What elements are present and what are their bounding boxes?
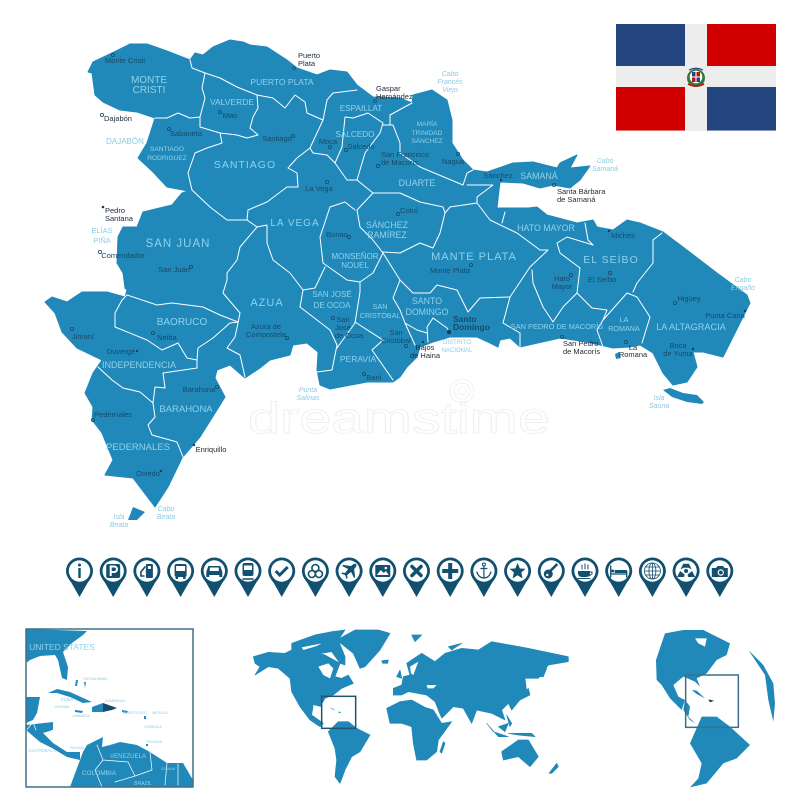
inset map: Caribbean region: JAMAICA <box>72 713 90 718</box>
province labels: NOUEL <box>341 261 369 270</box>
icon: biohazard <box>302 558 329 597</box>
labels outside the coastline: Isla <box>654 395 665 402</box>
inset map: Caribbean region: TRINIDAD <box>146 740 163 744</box>
locator box <box>686 675 738 727</box>
city labels: La <box>629 343 638 352</box>
city labels: San Juan <box>158 265 190 274</box>
icon: fuel station <box>133 558 160 597</box>
locator box <box>322 696 356 728</box>
labels outside the coastline: ELÍAS <box>91 226 113 235</box>
city labels: Salcedo <box>347 142 375 151</box>
icon: bed <box>605 558 632 597</box>
inset map: Caribbean region: ANTIGUA <box>152 711 168 715</box>
city labels: Barahona <box>183 385 216 394</box>
icon: coffee cup <box>572 558 598 597</box>
globe view <box>656 630 775 787</box>
city labels: José <box>335 323 351 332</box>
North America <box>656 630 730 710</box>
inset map: Caribbean region: CUBA <box>61 697 73 702</box>
inset map: Caribbean region: DOMINICA <box>144 725 162 729</box>
Eurasia <box>393 642 568 723</box>
labels outside the coastline: Samaná <box>592 166 618 173</box>
labels outside the coastline: Beata <box>157 514 175 521</box>
city labels: Oviedo <box>136 469 160 478</box>
city labels: Neiba <box>157 333 178 342</box>
icon: cross <box>403 558 430 597</box>
North America <box>253 648 353 727</box>
inset map: Caribbean region: THE BAHAMAS <box>82 677 108 681</box>
inset labels: COLOMBIA <box>82 770 117 777</box>
province labels: LA ALTAGRACIA <box>656 322 727 332</box>
province labels: MANTE PLATA <box>431 251 517 263</box>
city labels: El Seíbo <box>588 275 616 284</box>
Caribbean islands <box>692 690 705 698</box>
city labels: Sabaneta <box>170 129 203 138</box>
province labels: TRINIDAD <box>412 130 443 137</box>
labels outside the coastline: Viejo <box>442 87 458 94</box>
city labels: Mao <box>223 111 237 120</box>
labels outside the coastline: Saona <box>649 403 669 410</box>
city labels <box>70 51 746 478</box>
city labels: Enriquillo <box>196 445 226 454</box>
province borders <box>98 60 662 457</box>
city labels: La Vega <box>305 184 334 193</box>
labels outside the coastline: Cabo <box>442 71 458 78</box>
province labels: SAN PEDRO DE MACORÍS <box>511 322 603 331</box>
icon: parking <box>100 558 127 597</box>
inset labels: VENEZUELA <box>110 754 146 760</box>
labels outside the coastline: PIÑA <box>93 236 111 245</box>
watermark: dreamstime <box>248 394 550 443</box>
Asia-Pacific islands <box>487 668 547 737</box>
province labels: CRISTÓBAL <box>360 311 400 320</box>
labels outside the coastline: NACIONAL <box>442 348 473 354</box>
city labels: Sánchez <box>483 171 513 180</box>
province labels: SALCEDO <box>335 130 375 139</box>
labels outside the coastline: Salinas <box>297 395 320 402</box>
Central America <box>26 722 80 760</box>
city labels: Nagua <box>442 157 465 166</box>
inset labels: GUYANA <box>161 767 176 771</box>
country landmass <box>45 40 750 507</box>
province labels: SANTIAGO <box>150 146 184 153</box>
province labels: SAN JOSÉ <box>312 290 352 299</box>
icon: globe <box>639 558 666 597</box>
city labels: Bajos <box>416 343 435 352</box>
province labels: SÁNCHEZ <box>411 136 443 145</box>
inset labels: BRAZIL <box>134 781 152 787</box>
Africa crescent <box>748 650 775 722</box>
city labels: Santana <box>105 214 134 223</box>
city labels: Punta Cana <box>705 311 746 320</box>
city labels: Higüey <box>677 294 701 303</box>
icon: key <box>538 558 565 597</box>
province labels: INDEPENDENCIA <box>102 360 176 370</box>
province labels: VALVERDE <box>210 97 254 107</box>
city labels: San Pedro <box>563 339 598 348</box>
icon: airplane <box>336 558 363 597</box>
city labels: San Francisco <box>381 150 429 159</box>
province labels: HATO MAYOR <box>517 223 575 233</box>
smaller islands <box>382 635 462 753</box>
icon: camera <box>706 558 733 597</box>
inset frame <box>26 629 193 787</box>
Australia and New Zealand <box>502 740 558 773</box>
watermark <box>248 379 550 443</box>
icon: star <box>504 558 531 597</box>
city labels: de Macorís <box>563 347 600 356</box>
labels outside the coastline: Isla <box>114 514 125 521</box>
province labels: SAMANÁ <box>520 171 558 181</box>
province labels: LA VEGA <box>270 218 320 229</box>
city labels: de Macorís <box>381 158 418 167</box>
city labels: Hato <box>554 274 570 283</box>
map pin icon row <box>66 558 733 597</box>
city labels: Santiago <box>262 134 292 143</box>
city labels: Monte Cristi <box>105 56 145 65</box>
province labels: PERAVIA <box>340 354 376 364</box>
highlighted Dominican Republic <box>103 703 117 712</box>
Africa <box>387 700 452 760</box>
South America <box>690 717 750 787</box>
Canadian Arctic <box>292 630 345 665</box>
city labels: Comendador <box>101 251 145 260</box>
province labels: SANTIAGO <box>214 159 276 171</box>
flag of the Dominican Republic <box>616 24 776 131</box>
city labels: de Yuma <box>663 349 694 358</box>
labels outside the coastline: Engaño <box>731 285 755 292</box>
icon: information <box>66 558 93 597</box>
inland water <box>302 643 442 719</box>
world map <box>253 630 568 783</box>
city labels: Puerto <box>298 51 320 60</box>
city labels: Bonao <box>326 230 348 239</box>
icon: bus <box>167 558 194 597</box>
inset map: Caribbean region: CAYMAN <box>55 705 70 709</box>
city labels: Duvergé <box>107 347 135 356</box>
inset labels <box>28 642 176 787</box>
labels outside the coastline: Francés <box>437 79 463 86</box>
province labels: SAN <box>373 302 387 311</box>
Mexico <box>26 697 40 723</box>
inset borders <box>26 722 178 787</box>
icon: check mark <box>268 558 295 597</box>
Greenland <box>337 630 390 668</box>
islands <box>128 352 704 520</box>
city labels: Hernández <box>376 92 413 101</box>
inset map: Caribbean region: PUERTO RICO <box>123 711 147 715</box>
highlighted Dominican Republic <box>708 699 714 702</box>
labels outside the coastline: DAJABÓN <box>106 137 144 146</box>
icon: radiation <box>673 558 700 597</box>
city labels: San <box>389 328 403 337</box>
province labels: ROMANA <box>608 324 640 333</box>
city labels: Jimaní <box>72 332 95 341</box>
province labels: MARÍA <box>417 119 438 128</box>
inset labels: PANAMA <box>70 746 85 750</box>
province labels: DOMINGO <box>405 307 449 317</box>
icon: anchor <box>470 558 497 597</box>
labels outside the coastline: Cabo <box>735 277 751 284</box>
South America <box>70 737 193 787</box>
city labels: Santa Bárbara <box>557 187 606 196</box>
province labels: PEDERNALES <box>106 442 170 453</box>
city labels: Moca <box>319 137 338 146</box>
city labels: Dajabón <box>104 114 132 123</box>
city labels: Compostela <box>246 330 287 339</box>
city labels: Santo <box>453 314 477 324</box>
province labels: BARAHONA <box>159 404 213 415</box>
labels outside the coastline: Beata <box>110 522 128 529</box>
province labels: SÁNCHEZ <box>366 220 409 230</box>
province labels: MONTE <box>131 75 167 86</box>
Caribbean islands <box>75 680 148 746</box>
province labels: RAMÍREZ <box>367 230 407 240</box>
province labels: EL SEÍBO <box>583 253 639 266</box>
inset labels: UNITED STATES <box>29 642 95 652</box>
province labels: DE OCOA <box>314 301 351 310</box>
city labels: de Ocoa <box>335 331 364 340</box>
province labels <box>102 75 727 453</box>
city labels: Romana <box>619 350 648 359</box>
city labels: Domingo <box>453 322 490 332</box>
city labels: Pedernales <box>94 410 132 419</box>
city labels: Cotuí <box>400 206 419 215</box>
city labels: Azura de <box>251 322 281 331</box>
city labels: San <box>336 315 350 324</box>
labels outside the coastline <box>91 71 755 529</box>
province labels: SANTO <box>412 296 442 306</box>
icon: picture <box>369 558 396 597</box>
province labels: ESPAILLAT <box>340 104 382 113</box>
icon: car <box>201 558 228 597</box>
inset labels: GUATEMALA <box>28 748 56 753</box>
city labels: Mayor <box>552 282 573 291</box>
icon: train <box>234 558 262 597</box>
labels outside the coastline: Cabo <box>597 158 613 165</box>
Caribbean islands <box>330 707 341 713</box>
flag coat of arms <box>687 68 705 87</box>
province labels: DUARTE <box>399 178 435 188</box>
province labels: BAORUCO <box>157 317 208 328</box>
icon: plus <box>437 558 464 597</box>
province labels: CRISTI <box>133 85 165 96</box>
city labels: de Samaná <box>557 195 596 204</box>
province labels: RODRIGUEZ <box>147 155 187 162</box>
province labels: LA <box>620 315 629 324</box>
South America <box>328 722 370 783</box>
labels outside the coastline: Cabo <box>158 506 174 513</box>
city labels: Cristóbal <box>381 336 411 345</box>
Cuba <box>48 689 92 703</box>
city labels: de Haina <box>410 351 441 360</box>
province labels: AZUA <box>250 297 284 309</box>
city labels: Monte Plata <box>430 266 471 275</box>
labels outside the coastline: Punta <box>299 387 317 394</box>
inset map: Caribbean region <box>26 629 193 787</box>
United States <box>26 629 87 680</box>
Hudson Bay <box>695 638 707 647</box>
city labels: Gaspar <box>376 84 401 93</box>
main map: Dominican Republic <box>45 40 755 529</box>
province labels: PUERTO PLATA <box>250 77 314 87</box>
province labels: MONSEÑOR <box>331 252 379 261</box>
city labels: Pedro <box>105 206 125 215</box>
city labels: Boca <box>669 341 687 350</box>
city labels: Baní <box>366 373 383 382</box>
inset map: Caribbean region: DOMINICAN <box>105 699 125 703</box>
city labels: Miches <box>611 231 635 240</box>
Central America <box>683 700 695 723</box>
city labels: Plata <box>298 59 316 68</box>
province labels: SAN JUAN <box>146 238 210 250</box>
labels outside the coastline: DISTRITO <box>443 340 471 346</box>
